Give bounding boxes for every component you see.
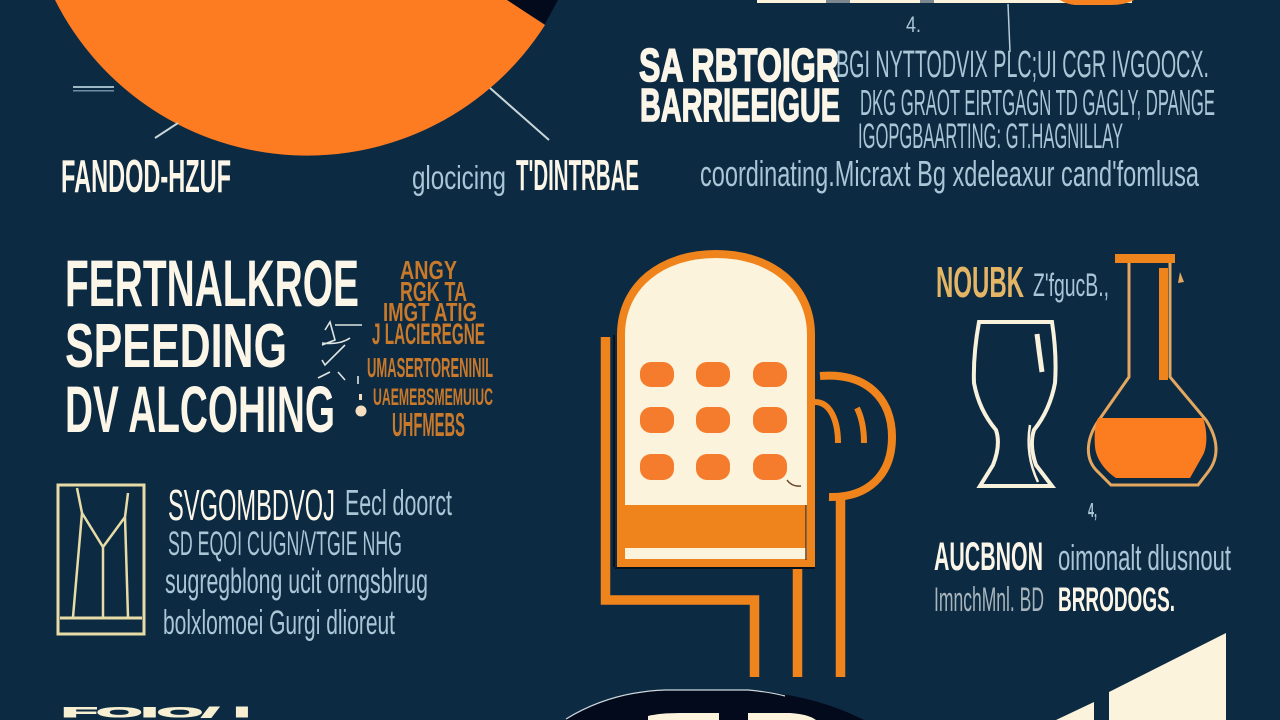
caption second line, bold word: BRRODOGS.: [1058, 581, 1175, 619]
heading top right: [639, 39, 840, 131]
icon: pint glass: [974, 322, 1056, 486]
bottom left figure fragment: FOIO/ l: [62, 704, 250, 720]
small mark below bar: 4.: [906, 12, 921, 37]
pie chart: orange circle with dark wedge: [55, 0, 558, 156]
text block beside frame: SVGOMBDVOJ: [168, 481, 335, 530]
text block beside frame: sugregblong ucit orngsblrug: [165, 562, 428, 601]
small mark below glasses: 4,: [1088, 500, 1097, 522]
orange text block: UAEMEBSMEMUIUC: [373, 384, 493, 411]
main heading: DV ALCOHING: [65, 372, 335, 446]
pie label right, light part: glocicing: [412, 159, 506, 196]
orange text block: UHFMEBS: [392, 406, 465, 443]
label above glasses, light part: Z'fgucB.,: [1033, 267, 1109, 303]
orange text block: RGK TA: [400, 276, 467, 307]
bottom right cream bars: [1056, 633, 1226, 720]
mug dots: [640, 362, 787, 480]
main heading: FERTNALKROE: [65, 246, 359, 320]
main heading: [65, 246, 359, 446]
heading top right: BARRIEEIGUE: [640, 79, 840, 131]
orange text block: IMGT ATIG: [383, 297, 477, 327]
heading top right: SA RBTOIGR: [639, 39, 839, 91]
text block beside frame: bolxlomoei Gurgi dlioreut: [163, 604, 395, 642]
beer band: [617, 505, 806, 548]
mug base: [613, 335, 815, 569]
bottom centre dark ellipse icon: [566, 690, 864, 720]
text block beside frame: SD EQOI CUGN/VTGIE NHG: [168, 525, 402, 563]
mug handle: [815, 376, 892, 497]
text: UMASERTORENINIL: [367, 352, 493, 383]
caption second line, grey text: ImnchMnl. BD: [934, 581, 1044, 619]
main heading: SPEEDING: [65, 312, 287, 381]
icon: flask: [1088, 254, 1216, 485]
orange text block: [367, 255, 493, 443]
paragraph top right: [700, 44, 1215, 194]
label above glasses, gold part: NOUBK: [936, 258, 1024, 307]
icon: beer mug: [606, 254, 892, 677]
text block beside frame: Eecl doorct: [345, 482, 452, 523]
scribble annotation: [318, 322, 366, 416]
pie label left: FANDOD-HZUF: [61, 150, 231, 202]
text block beside frame: [163, 481, 452, 642]
mug body: [621, 254, 811, 563]
mug legs and pipes: [606, 337, 840, 677]
top bar with orange end: [757, 0, 1134, 52]
orange text block: J LACIEREGNE: [372, 318, 485, 351]
icon: framed Y diagram: [58, 485, 144, 634]
orange text block: ANGY: [400, 255, 457, 285]
text: T'DINTRBAE: [516, 151, 639, 200]
caption, bold word: AUCBNON: [934, 535, 1043, 579]
